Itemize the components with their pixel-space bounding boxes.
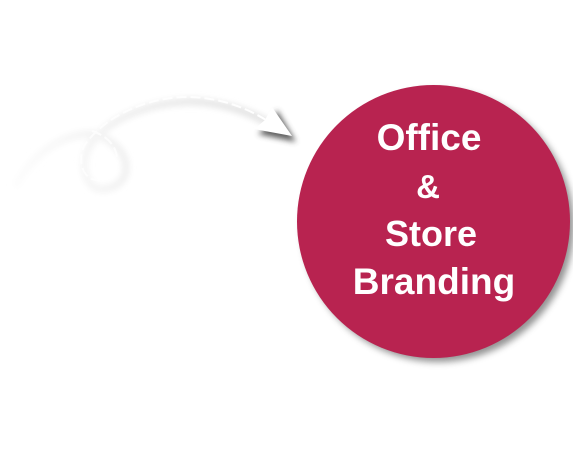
heading: Office & Store Branding: Branding xyxy=(353,261,515,302)
arrow: curved looping path xyxy=(15,97,296,189)
arrow head xyxy=(254,107,292,136)
arrow head shadow xyxy=(258,110,296,142)
heading: Office & Store Branding: Office xyxy=(377,117,481,158)
heading: Office & Store Branding xyxy=(353,117,515,302)
heading: Office & Store Branding: & xyxy=(416,168,440,205)
panel: circle badge xyxy=(297,85,573,362)
heading: Office & Store Branding: Store xyxy=(385,213,477,254)
